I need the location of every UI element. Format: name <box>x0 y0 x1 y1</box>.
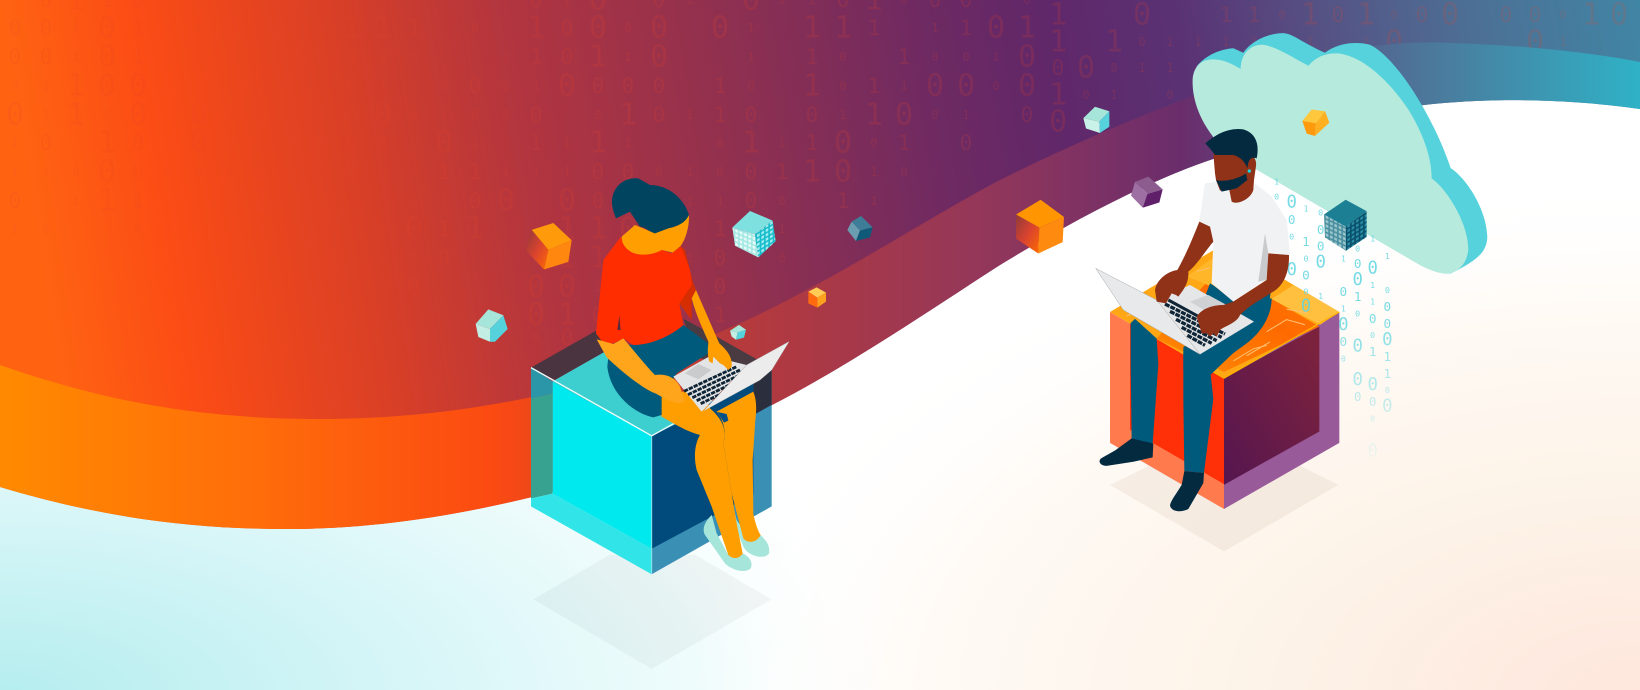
binary digits texture: 11 <box>438 217 726 241</box>
laptop on woman's lap <box>673 342 789 412</box>
binary digits texture: 1100111010 <box>11 136 878 150</box>
woman: near shoe <box>704 515 752 571</box>
binary digits texture: 11100 <box>98 184 576 218</box>
man: beard <box>1216 173 1247 192</box>
cube: vertical edge <box>650 436 653 574</box>
binary digits texture: 1000101 <box>11 222 786 236</box>
binary digits texture: 01100 <box>1110 61 1482 75</box>
binary digits texture: 1111100011 <box>72 21 939 35</box>
laptop: touchpad <box>1190 295 1227 312</box>
laptop: base <box>1157 285 1254 354</box>
woman: sleeve fold <box>617 316 621 330</box>
cube: top back left dark <box>531 331 608 380</box>
binary digits texture: 110000011 <box>224 74 880 98</box>
binary digits texture: 00 <box>438 246 726 270</box>
binary digits texture: 01 <box>527 298 576 332</box>
cube: mint top <box>1083 107 1109 133</box>
binary digits texture: 11 <box>558 240 607 276</box>
laptop: keyboard keys <box>684 367 750 404</box>
cube: top inner <box>553 350 680 436</box>
binary digits texture: 0011011 <box>9 16 972 40</box>
binary digits texture: 0 <box>1049 104 1067 140</box>
binary digits texture: 010 <box>1082 88 1174 102</box>
woman: far arm and hand <box>692 290 732 370</box>
cube: big orange on ribbon <box>1016 200 1064 253</box>
man: lower legs and shoes <box>1100 289 1271 511</box>
cube: edge highlight <box>1213 312 1339 378</box>
cube: left face outer <box>1110 312 1224 509</box>
woman: gap between legs <box>717 412 728 423</box>
binary digits texture: 0011110010010 <box>11 79 1000 93</box>
cube: left face inner <box>1130 323 1224 484</box>
woman: legs and shoes <box>659 390 769 571</box>
woman: near leg <box>659 390 743 558</box>
cube: right face inner <box>652 379 753 549</box>
man: far leg <box>1131 319 1158 444</box>
cube: glass left strip middle <box>531 394 553 498</box>
man: earring <box>1248 169 1251 173</box>
cube: top back left highlight <box>1187 258 1224 289</box>
cube: small orange <box>808 287 826 308</box>
woman: far leg <box>717 392 761 542</box>
cube shadow <box>533 555 772 669</box>
binary digits texture: 10001110001 <box>72 50 1000 64</box>
man: far arm and hand <box>1155 222 1213 303</box>
binary digits texture: 01 <box>592 303 726 327</box>
ribbon: flowing band from orange to teal <box>0 42 1640 529</box>
binary digits texture: 1001010001101 <box>42 108 970 122</box>
man's cube <box>1110 244 1339 551</box>
binary digits texture: 1 <box>594 280 602 294</box>
binary rain from the cloud: 00100000100100011 <box>1288 212 1391 409</box>
binary digits texture: 00 <box>527 270 576 304</box>
cube: top back corner highlight <box>1272 285 1339 325</box>
woman: neck and face <box>622 215 689 255</box>
binary digits texture: 001110001101 <box>98 10 1036 46</box>
woman: torso, head, laptop and arms <box>596 178 789 417</box>
woman: skirt <box>607 325 708 417</box>
binary digits texture: 0010 <box>98 154 852 190</box>
cube: right face outer <box>1224 312 1339 509</box>
laptop: lid <box>1096 268 1200 354</box>
woman's cube <box>531 319 772 669</box>
cube: teal data cube <box>1324 200 1367 251</box>
cube: white edge <box>531 368 677 436</box>
laptop: touchpad <box>685 364 712 379</box>
cloud: extruded side <box>1197 33 1487 274</box>
binary digits texture: 1010110 <box>98 126 852 160</box>
laptop: keyboard keys <box>1165 304 1225 345</box>
woman: far shoe <box>728 498 769 557</box>
binary digits texture <box>6 0 1628 350</box>
cloud: front face <box>1193 45 1468 274</box>
binary digits texture: 0001000 <box>346 103 1033 127</box>
binary digits texture: 0 <box>532 331 540 345</box>
woman: near arm and hand <box>597 338 685 403</box>
cube: right face outer <box>652 367 772 574</box>
woman: shirt <box>596 237 692 345</box>
binary digits texture: 1 <box>1049 78 1067 112</box>
cube: purple <box>1131 177 1163 208</box>
binary digits texture: 10010 <box>256 251 786 265</box>
binary digits texture: 1101011101 <box>72 194 878 208</box>
cube: orange near woman <box>526 223 572 269</box>
floating cubes <box>476 107 1367 342</box>
binary digits texture: 000 <box>1278 8 1567 22</box>
woman: hair <box>612 178 689 233</box>
binary digits texture: 1100 <box>1049 24 1544 60</box>
cube shadow <box>1110 457 1338 551</box>
binary digits texture: 00 <box>408 275 726 299</box>
cube: tiny mint <box>730 325 746 340</box>
man: near leg <box>1183 289 1271 473</box>
binary digits texture: 0100 <box>98 40 1036 74</box>
cube: top face <box>1110 244 1339 378</box>
cube: mint left <box>476 309 508 342</box>
cube: right face inner <box>1224 326 1319 485</box>
binary rain from the cloud: 0000000000000 <box>1286 193 1393 462</box>
binary digits texture: 001010111011 <box>9 45 910 69</box>
cube: glass left strip upper <box>531 368 553 399</box>
binary digits texture: 010001 <box>9 189 849 213</box>
cube: cyan data cube <box>732 211 776 257</box>
cube: glass bottom strip <box>531 494 652 574</box>
binary digits texture: 011 <box>1052 56 1541 80</box>
cube: blue small <box>847 216 873 241</box>
binary digits texture: 110000011101010 <box>11 165 908 179</box>
cube: top back right dark <box>683 319 772 377</box>
man: shirt <box>1199 182 1290 302</box>
man: shirt shade <box>1258 233 1268 282</box>
man: lap <box>1183 283 1272 370</box>
cube: top face inner <box>1157 275 1319 372</box>
man: neck, ear and face <box>1213 153 1256 203</box>
binary rain from the cloud: 100100011100011100100 <box>1274 177 1390 423</box>
background: gradient sky <box>0 0 1640 529</box>
binary digits texture: 0100010110 <box>6 98 913 132</box>
man: near arm and hand <box>1197 253 1289 337</box>
laptop: base <box>673 356 747 412</box>
man: far shoe <box>1100 438 1153 466</box>
cube: bright left face <box>553 381 652 549</box>
binary digits texture: 01111111 <box>1138 35 1567 49</box>
binary digits texture: 110000 <box>1220 3 1541 27</box>
binary digits texture: 0 <box>561 326 573 350</box>
cube: right strip dark <box>753 367 772 415</box>
man: near shoe <box>1170 471 1204 511</box>
man: hair <box>1205 129 1258 168</box>
binary digits texture: 100101000 <box>67 68 1036 104</box>
binary digits texture: 0000110001 <box>132 160 788 184</box>
laptop: space bar strip <box>1168 300 1200 317</box>
cube: orange in cloud <box>1302 110 1329 136</box>
cloud <box>1193 33 1487 274</box>
binary digits texture: 011100 <box>405 212 668 246</box>
cube: circuit traces <box>1127 268 1307 361</box>
binary digits texture: 00001110 <box>40 131 972 155</box>
woman: shadow under sleeve <box>679 246 696 320</box>
laptop: lid <box>704 342 789 411</box>
laptop on man's lap <box>1096 268 1254 354</box>
binary digits texture: 00 <box>1077 50 1459 86</box>
man: torso, head, laptop and arms <box>1096 129 1290 370</box>
